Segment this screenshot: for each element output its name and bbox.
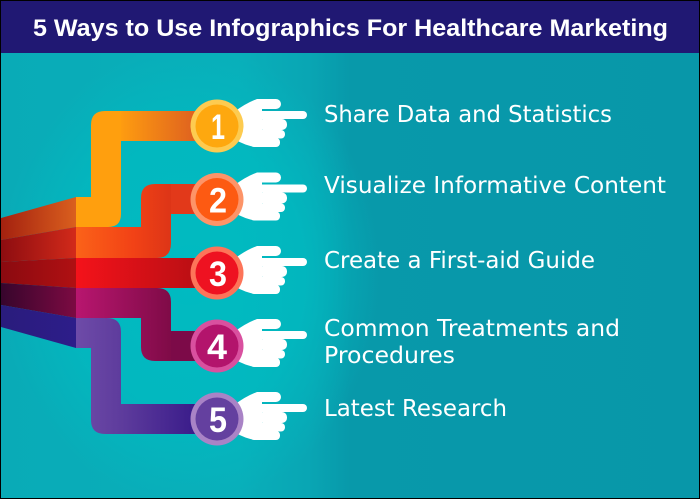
- ribbon 1: orange: [76, 111, 196, 227]
- label 5: Latest Research: [324, 394, 507, 422]
- label 4: [324, 314, 620, 369]
- title: 5 Ways to Use Infographics For Healthcare Marketing: [33, 15, 668, 42]
- icon: pointing hand 2: [234, 172, 307, 220]
- label 4: Common Treatments and: [324, 314, 620, 342]
- wedge stack on left edge: [1, 197, 76, 348]
- icon: pointing hand 3: [234, 246, 307, 294]
- number 1: 1: [211, 108, 225, 147]
- step 3: badge and pointing hand: [190, 246, 307, 300]
- number 5: 5: [209, 401, 227, 440]
- icon: pointing hand 5: [234, 392, 307, 440]
- ribbon 4: magenta: [76, 288, 196, 361]
- number 4: 4: [207, 328, 228, 367]
- ribbon 2: red-orange: [76, 184, 196, 258]
- step 4: badge and pointing hand: [190, 319, 307, 372]
- label 2: Visualize Informative Content: [324, 171, 666, 199]
- ribbon 3: red: [76, 258, 196, 288]
- step 2: badge and pointing hand: [190, 172, 307, 226]
- label 1: Share Data and Statistics: [324, 100, 612, 128]
- step 5: badge and pointing hand: [190, 392, 307, 446]
- ribbon 5: purple: [76, 318, 196, 434]
- number 2: 2: [209, 182, 227, 220]
- label 4: Procedures: [324, 341, 455, 369]
- header banner: [1, 1, 699, 53]
- icon: pointing hand 1: [234, 99, 307, 147]
- number 3: 3: [209, 255, 227, 294]
- step 1: badge and pointing hand: [190, 99, 307, 152]
- label 3: Create a First-aid Guide: [324, 246, 595, 274]
- icon: pointing hand 4: [234, 319, 307, 367]
